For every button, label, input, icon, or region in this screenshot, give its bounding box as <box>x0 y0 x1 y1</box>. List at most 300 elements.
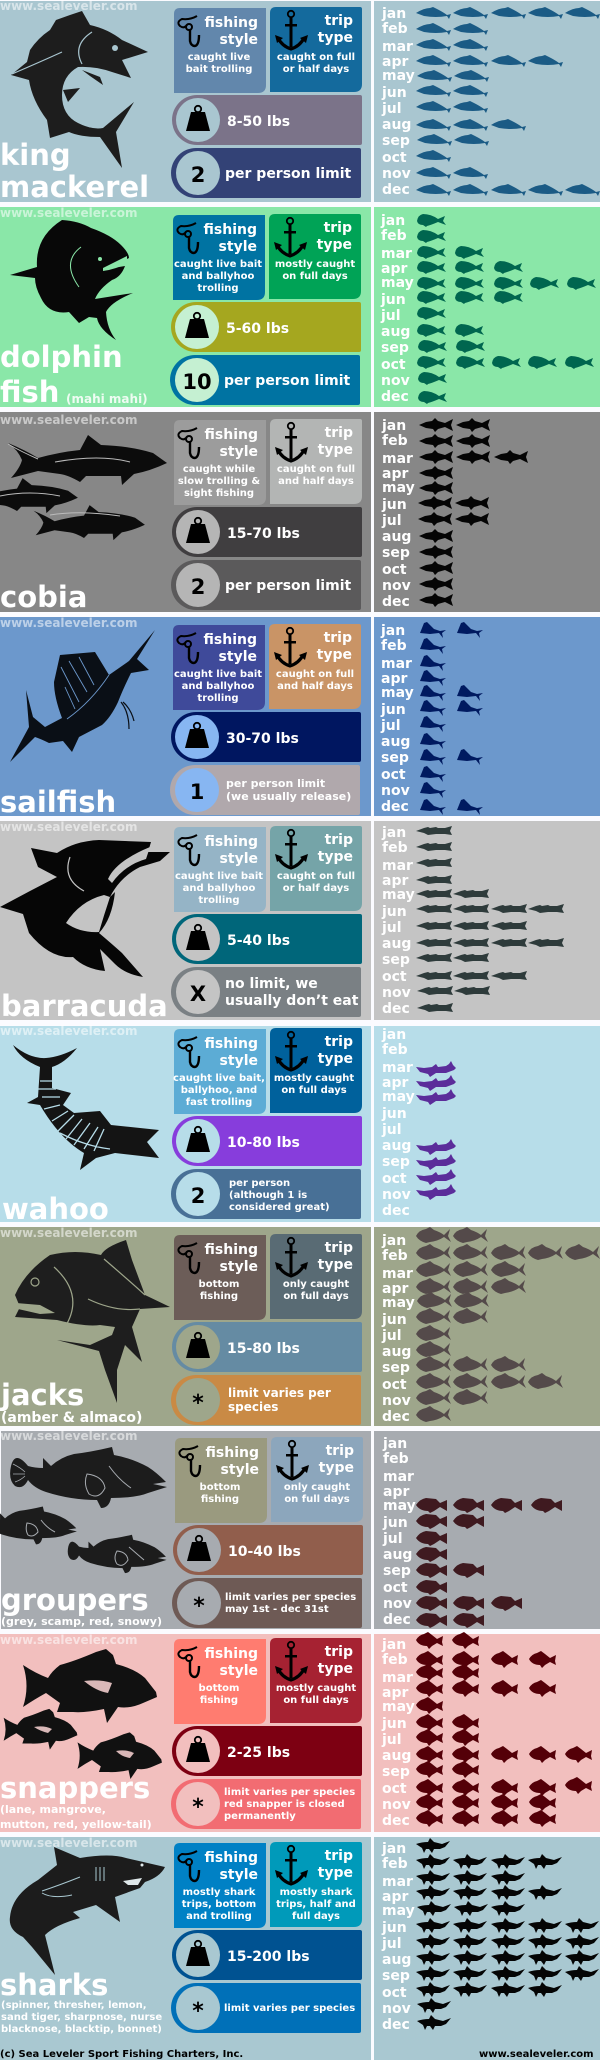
month labels: may <box>382 1089 415 1105</box>
box: trip type: on full days <box>283 1291 349 1302</box>
illustration: jack <box>15 1240 170 1403</box>
box: trip type: on full days <box>284 1494 350 1505</box>
title: snappers <box>0 1771 150 1805</box>
month labels: dec <box>382 1409 410 1425</box>
month labels: may <box>382 68 415 84</box>
illustration: three cobia <box>0 435 167 540</box>
box: weight: 15-80 lbs <box>227 1341 300 1357</box>
box: fishing style: trolling <box>197 283 239 294</box>
month labels: oct <box>383 1580 408 1596</box>
month labels: aug <box>382 1344 411 1360</box>
month labels: jun <box>380 702 406 718</box>
box: limit <box>171 148 361 198</box>
month labels: may <box>382 1295 415 1311</box>
panel: groupers left background <box>1 1431 371 1629</box>
box: trip type: trip <box>325 425 353 441</box>
month labels: apr <box>383 1484 409 1500</box>
panel: cobia calendar background <box>374 412 600 612</box>
box: weight <box>171 712 361 762</box>
box: fishing style <box>173 215 265 300</box>
box: limit <box>171 560 361 610</box>
box: weight <box>172 1726 362 1776</box>
month labels: apr <box>381 671 407 687</box>
box: trip type <box>270 419 362 504</box>
month labels: oct <box>382 562 407 578</box>
box: trip type: trip <box>325 13 353 29</box>
month labels: nov <box>382 985 411 1001</box>
box: limit: per person limit <box>225 578 351 594</box>
box: trip type: caught on full <box>277 52 355 63</box>
box: trip type: trip <box>325 832 353 848</box>
title <box>0 1378 142 1426</box>
month labels: aug <box>382 1952 411 1968</box>
title: (mahi mahi) <box>66 392 148 406</box>
box: fishing style <box>174 827 266 912</box>
month labels: mar <box>382 1266 413 1282</box>
box: limit: * <box>192 1999 204 2024</box>
box: trip type: caught on full <box>277 464 355 475</box>
month labels: feb <box>382 840 408 856</box>
month labels: apr <box>382 1281 408 1297</box>
month labels: feb <box>382 1042 408 1058</box>
month labels: jun <box>381 497 407 513</box>
month labels: jul <box>381 920 402 936</box>
section: wahoo <box>0 1024 600 1226</box>
month labels <box>381 6 415 198</box>
month labels: apr <box>382 1685 408 1701</box>
month labels <box>382 1436 416 1628</box>
box: limit: (we usually release) <box>226 790 351 803</box>
month labels: mar <box>382 39 413 55</box>
section: cobia <box>0 412 600 614</box>
box: weight <box>172 1930 362 1980</box>
month labels: mar <box>382 1670 413 1686</box>
month labels: jan <box>381 1233 406 1249</box>
section: sharks <box>0 1836 600 2060</box>
box: fishing style: caught live bait <box>175 871 263 882</box>
box: weight: 5-40 lbs <box>227 933 290 949</box>
illustration: dolphin fish <box>10 220 133 340</box>
box: fishing style: bottom <box>200 1482 240 1493</box>
box: fishing style <box>174 1639 266 1724</box>
box: fishing style: style <box>220 1867 258 1883</box>
month labels: dec <box>382 594 410 610</box>
month labels: oct <box>382 1377 407 1393</box>
month labels: mar <box>381 656 412 672</box>
title: king <box>0 138 71 172</box>
illustration: wahoo <box>13 1045 159 1170</box>
month labels: nov <box>382 1393 411 1409</box>
title: sailfish <box>0 785 116 819</box>
month labels: mar <box>382 1060 413 1076</box>
box: trip type: type <box>318 1865 353 1881</box>
month labels: sep <box>382 1764 410 1780</box>
month labels: apr <box>382 466 408 482</box>
month labels: jul <box>380 718 401 734</box>
panel: dolphin calendar background <box>374 207 600 407</box>
box: fishing style: style <box>220 1053 258 1069</box>
box: trip type <box>270 1028 362 1113</box>
month labels: jul <box>381 1936 402 1952</box>
month labels: jul <box>380 308 401 324</box>
box: fishing style <box>174 1235 266 1320</box>
month labels: jul <box>382 1531 403 1547</box>
box: trip type: trips, half and <box>276 1899 356 1910</box>
monthly fish counts <box>416 1227 600 1422</box>
panel: cobia left background <box>0 412 371 612</box>
box: fishing style: sight fishing <box>184 488 254 499</box>
box: limit <box>171 967 361 1017</box>
watermark: www.sealeveler.com <box>0 616 138 630</box>
month labels: aug <box>382 117 411 133</box>
month labels: jan <box>381 1027 406 1043</box>
title: dolphin <box>0 340 123 374</box>
month labels: aug <box>382 529 411 545</box>
month labels: aug <box>382 936 411 952</box>
box: fishing style: style <box>219 649 257 665</box>
month labels: jun <box>380 292 406 308</box>
month labels: dec <box>383 1612 411 1628</box>
month labels <box>381 1841 415 2033</box>
month labels: dec <box>382 1001 410 1017</box>
month labels <box>381 825 415 1017</box>
title: (lane, mangrove, <box>0 1803 106 1816</box>
box: trip type: or half days <box>283 883 349 894</box>
box: trip type: on full days <box>281 1085 347 1096</box>
box: limit: limit varies per species <box>224 2003 355 2014</box>
watermark: www.sealeveler.com <box>0 206 138 220</box>
title: jacks <box>0 1378 84 1412</box>
month labels: jan <box>382 1436 407 1452</box>
box: trip type: type <box>318 1661 353 1677</box>
month labels: feb <box>383 1451 409 1467</box>
month labels: sep <box>382 545 410 561</box>
box: limit: 2 <box>191 163 205 187</box>
box: fishing style: caught live bait, <box>173 1073 265 1084</box>
monthly fish counts <box>416 1632 592 1827</box>
month labels: jan <box>380 213 405 229</box>
box: fishing style <box>173 1029 266 1114</box>
box: limit: (although 1 is <box>229 1190 307 1201</box>
monthly fish counts <box>416 1498 562 1628</box>
month labels: nov <box>382 1187 411 1203</box>
panel: king mackerel left background <box>0 1 371 202</box>
month labels <box>380 213 414 405</box>
month labels: jan <box>380 623 405 639</box>
month labels: nov <box>383 1596 412 1612</box>
box: fishing style: style <box>219 239 257 255</box>
monthly fish counts <box>416 7 600 196</box>
month labels: jun <box>382 1515 408 1531</box>
box: limit <box>171 1779 361 1829</box>
box: trip type: mostly caught <box>275 259 355 270</box>
month labels: feb <box>382 1248 408 1264</box>
box: fishing style: style <box>220 851 258 867</box>
month labels: feb <box>382 1856 408 1872</box>
box: trip type: type <box>318 442 353 458</box>
month labels: mar <box>382 1874 413 1890</box>
box: weight: 15-200 lbs <box>227 1949 310 1965</box>
month labels: apr <box>382 1889 408 1905</box>
box: limit: permanently <box>224 1811 296 1822</box>
box: limit <box>171 1169 361 1219</box>
month labels: aug <box>381 734 410 750</box>
title <box>0 1771 152 1831</box>
title: fish <box>0 375 59 409</box>
box: trip type: type <box>318 1051 353 1067</box>
box: fishing style: caught live <box>188 52 250 63</box>
box: fishing style: fishing <box>205 1036 258 1052</box>
box: fishing style: slow trolling & <box>178 476 260 487</box>
box: trip type: only caught <box>284 1482 350 1493</box>
box: limit: limit varies per species <box>225 1592 356 1603</box>
illustration: three snappers <box>4 1649 162 1779</box>
title: blacknose, blacktip, bonnet) <box>1 2024 162 2035</box>
section: barracuda <box>0 820 600 1023</box>
box: fishing style: style <box>220 32 258 48</box>
month labels: feb <box>381 638 407 654</box>
footer: website: www.sealeveler.com <box>479 2049 594 2060</box>
month labels: sep <box>381 340 409 356</box>
box: fishing style: style <box>220 1663 258 1679</box>
box: fishing style: bottom <box>199 1683 239 1694</box>
box: fishing style <box>174 1843 266 1928</box>
title: (spinner, thresher, lemon, <box>1 2000 146 2011</box>
box: limit: limit varies per <box>228 1386 331 1400</box>
box: trip type: trip <box>325 1644 353 1660</box>
box: limit <box>171 1375 361 1425</box>
box: trip type: trip <box>324 630 352 646</box>
title <box>1 1583 162 1628</box>
box: limit <box>171 1983 361 2033</box>
box: limit <box>170 765 360 815</box>
title: cobia <box>0 580 87 614</box>
box: fishing style: mostly shark <box>183 1887 256 1898</box>
panel: sailfish left background <box>0 617 371 816</box>
title: sharks <box>0 1968 108 2002</box>
month labels: aug <box>383 1547 412 1563</box>
box: weight: 8-50 lbs <box>227 114 290 130</box>
box: fishing style: fishing <box>205 427 258 443</box>
box: weight: 30-70 lbs <box>226 731 299 747</box>
box: limit: may 1st - dec 31st <box>225 1604 329 1615</box>
title: mackerel <box>0 170 149 204</box>
title <box>0 138 149 204</box>
title: groupers <box>1 1583 149 1617</box>
month labels: mar <box>383 1469 414 1485</box>
box: weight: 2-25 lbs <box>227 1745 290 1761</box>
panel: jacks calendar background <box>374 1227 600 1426</box>
box: fishing style: bait trolling <box>186 64 252 75</box>
box: trip type: mostly caught <box>276 1683 356 1694</box>
month labels: jan <box>381 825 406 841</box>
month labels: jul <box>381 1122 402 1138</box>
month labels: may <box>382 887 415 903</box>
month labels: dec <box>382 1813 410 1829</box>
box: weight: 10-40 lbs <box>228 1544 301 1560</box>
month labels: jul <box>381 513 402 529</box>
month labels: jul <box>381 101 402 117</box>
box: fishing style <box>174 8 266 93</box>
box: trip type: full days <box>292 1911 340 1922</box>
month labels: sep <box>383 1563 411 1579</box>
month labels: nov <box>382 2001 411 2017</box>
section: jacks <box>0 1226 600 1426</box>
title <box>0 1968 162 2035</box>
month labels: sep <box>382 1968 410 1984</box>
month labels: apr <box>382 54 408 70</box>
box: fishing style: caught while <box>183 464 255 475</box>
title <box>0 340 148 409</box>
box: trip type: trip <box>325 1240 353 1256</box>
month labels: aug <box>382 1748 411 1764</box>
box: limit <box>170 355 360 405</box>
month labels: nov <box>381 783 410 799</box>
month labels: dec <box>381 389 409 405</box>
box: trip type: trip <box>325 1034 353 1050</box>
box: trip type: mostly caught <box>274 1073 354 1084</box>
month labels: feb <box>382 433 408 449</box>
box: limit: usually don’t eat <box>225 993 359 1009</box>
box: limit: considered great) <box>229 1202 330 1213</box>
box: fishing style: caught live bait <box>174 669 262 680</box>
month labels: sep <box>381 750 409 766</box>
month labels: may <box>383 1498 416 1514</box>
month labels: jun <box>381 85 407 101</box>
month labels: jul <box>381 1328 402 1344</box>
box: fishing style <box>175 1438 267 1523</box>
box: trip type: on full days <box>282 271 348 282</box>
box: trip type <box>270 7 362 92</box>
box: trip type: or half days <box>283 64 349 75</box>
box: trip type <box>270 1638 362 1723</box>
box: limit: no limit, we <box>225 976 318 992</box>
box: limit: red snapper is closed <box>224 1799 345 1810</box>
section: sailfish <box>0 616 600 819</box>
box: fishing style: style <box>220 444 258 460</box>
box: trip type: and half days <box>277 681 353 692</box>
box: weight <box>172 1116 362 1166</box>
box: fishing style: and ballyhoo <box>182 271 254 282</box>
box: trip type: type <box>319 1460 354 1476</box>
month labels <box>380 623 414 815</box>
box: limit: * <box>193 1594 205 1619</box>
box: fishing style: trolling <box>198 895 240 906</box>
month labels: oct <box>381 767 406 783</box>
month labels: jul <box>381 1732 402 1748</box>
box: limit: 1 <box>190 780 204 804</box>
box: limit: * <box>192 1795 204 1820</box>
month labels: oct <box>382 969 407 985</box>
footer: copyright: (c) Sea Leveler Sport Fishing Charters, Inc. <box>0 2049 243 2060</box>
box: limit: 10 <box>182 370 212 394</box>
month labels: jun <box>381 1106 407 1122</box>
box: fishing style: fishing <box>205 1242 258 1258</box>
month labels: sep <box>382 952 410 968</box>
month labels: sep <box>382 133 410 149</box>
month labels: nov <box>382 1797 411 1813</box>
box: trip type: trip <box>324 220 352 236</box>
month labels: may <box>381 275 414 291</box>
box: fishing style: and ballyhoo <box>182 681 254 692</box>
box: fishing style: trips, bottom <box>182 1899 256 1910</box>
box: fishing style: fishing <box>200 1695 238 1706</box>
panel: sharks calendar background <box>374 1837 600 2060</box>
watermark: www.sealeveler.com <box>0 1429 138 1443</box>
month labels: feb <box>382 1652 408 1668</box>
box: weight <box>172 95 362 145</box>
box: fishing style: and ballyhoo <box>183 883 255 894</box>
box: fishing style: caught live bait <box>174 259 262 270</box>
box: trip type: on full days <box>283 1695 349 1706</box>
month labels: may <box>382 1903 415 1919</box>
panel: snappers calendar background <box>374 1634 600 1832</box>
box: trip type: type <box>317 237 352 253</box>
box: fishing style: ballyhoo, and <box>181 1085 257 1096</box>
box: weight <box>173 1525 363 1575</box>
month labels: mar <box>382 451 413 467</box>
box: fishing style: fishing <box>205 15 258 31</box>
month labels: nov <box>382 166 411 182</box>
box: fishing style: fishing <box>205 1850 258 1866</box>
watermark: www.sealeveler.com <box>0 1836 138 1850</box>
month labels: mar <box>382 858 413 874</box>
month labels: jan <box>381 1637 406 1653</box>
month labels <box>381 1233 415 1425</box>
month labels: may <box>382 480 415 496</box>
box: trip type <box>269 624 361 709</box>
section: king mackerel <box>0 0 600 204</box>
box: trip type: and half days <box>278 476 354 487</box>
month labels: feb <box>381 228 407 244</box>
box: fishing style: fast trolling <box>186 1097 252 1108</box>
panel: wahoo left background <box>0 1026 371 1222</box>
watermark: www.sealeveler.com <box>0 820 138 834</box>
box: trip type: mostly shark <box>280 1887 353 1898</box>
title: (amber & almaco) <box>1 1410 142 1426</box>
watermark: www.sealeveler.com <box>0 1633 138 1647</box>
panel: king mackerel calendar background <box>374 1 600 202</box>
month labels: apr <box>382 1075 408 1091</box>
box: fishing style: fishing <box>205 1646 258 1662</box>
month labels: jan <box>381 6 406 22</box>
box: fishing style: fishing <box>205 834 258 850</box>
panel: sailfish calendar background <box>374 617 600 816</box>
illustration: three groupers <box>0 1447 167 1573</box>
box: trip type <box>270 826 362 911</box>
title: sand tiger, sharpnose, nurse <box>1 2012 162 2023</box>
month labels: oct <box>382 1781 407 1797</box>
illustration: shark <box>10 1847 165 1975</box>
month labels: sep <box>382 1154 410 1170</box>
month labels: nov <box>382 578 411 594</box>
box: weight: 15-70 lbs <box>227 526 300 542</box>
month labels <box>381 1027 415 1219</box>
title: (grey, scamp, red, snowy) <box>1 1615 162 1628</box>
box: limit: limit varies per species <box>224 1787 355 1798</box>
month labels: oct <box>381 357 406 373</box>
box: trip type: only caught <box>283 1279 349 1290</box>
month labels: jun <box>381 1920 407 1936</box>
month labels: oct <box>382 1985 407 2001</box>
illustration: sailfish <box>10 630 155 762</box>
month labels: feb <box>382 21 408 37</box>
month labels: dec <box>382 1203 410 1219</box>
month labels: aug <box>382 1138 411 1154</box>
month labels: dec <box>382 2017 410 2033</box>
box: weight: 5-60 lbs <box>226 321 289 337</box>
monthly fish counts <box>416 826 564 1012</box>
